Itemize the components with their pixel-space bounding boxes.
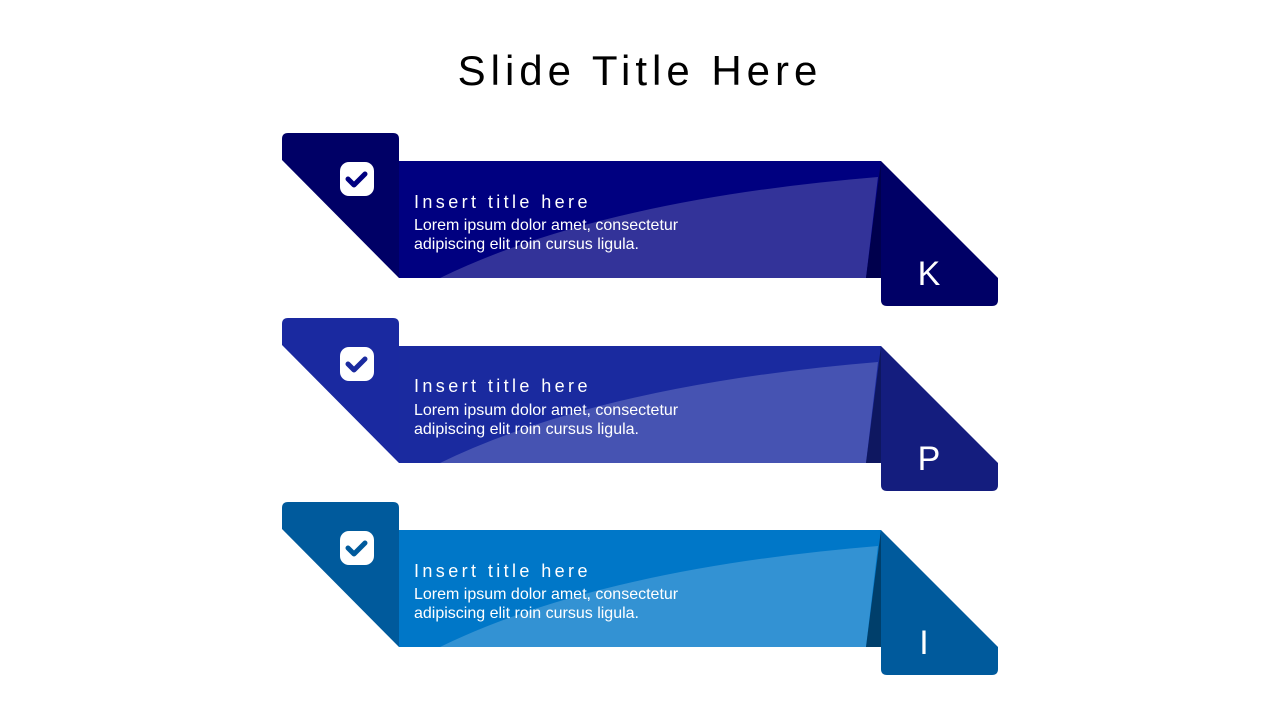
letter P: P [918,440,940,478]
title: Slide Title Here [458,47,822,94]
letter K: K [918,255,941,293]
icon: check [340,162,374,196]
text block: Insert title here [414,192,591,212]
text block [414,376,679,438]
text block [414,561,679,622]
icon: check [340,531,374,565]
text block: adipiscing elit roin cursus ligula. [414,236,639,253]
text block: adipiscing elit roin cursus ligula. [414,421,639,438]
panel: P [282,318,998,491]
text block: Insert title here [414,376,591,396]
text block: Lorem ipsum dolor amet, consectetur [414,217,679,234]
icon: check [340,347,374,381]
panel: I [282,502,998,675]
text block: Lorem ipsum dolor amet, consectetur [414,402,679,419]
text block: adipiscing elit roin cursus ligula. [414,605,639,622]
letter I: I [919,624,929,662]
text block [414,192,679,253]
text block: Insert title here [414,561,591,581]
text block: Lorem ipsum dolor amet, consectetur [414,586,679,603]
panel: K [282,133,998,306]
